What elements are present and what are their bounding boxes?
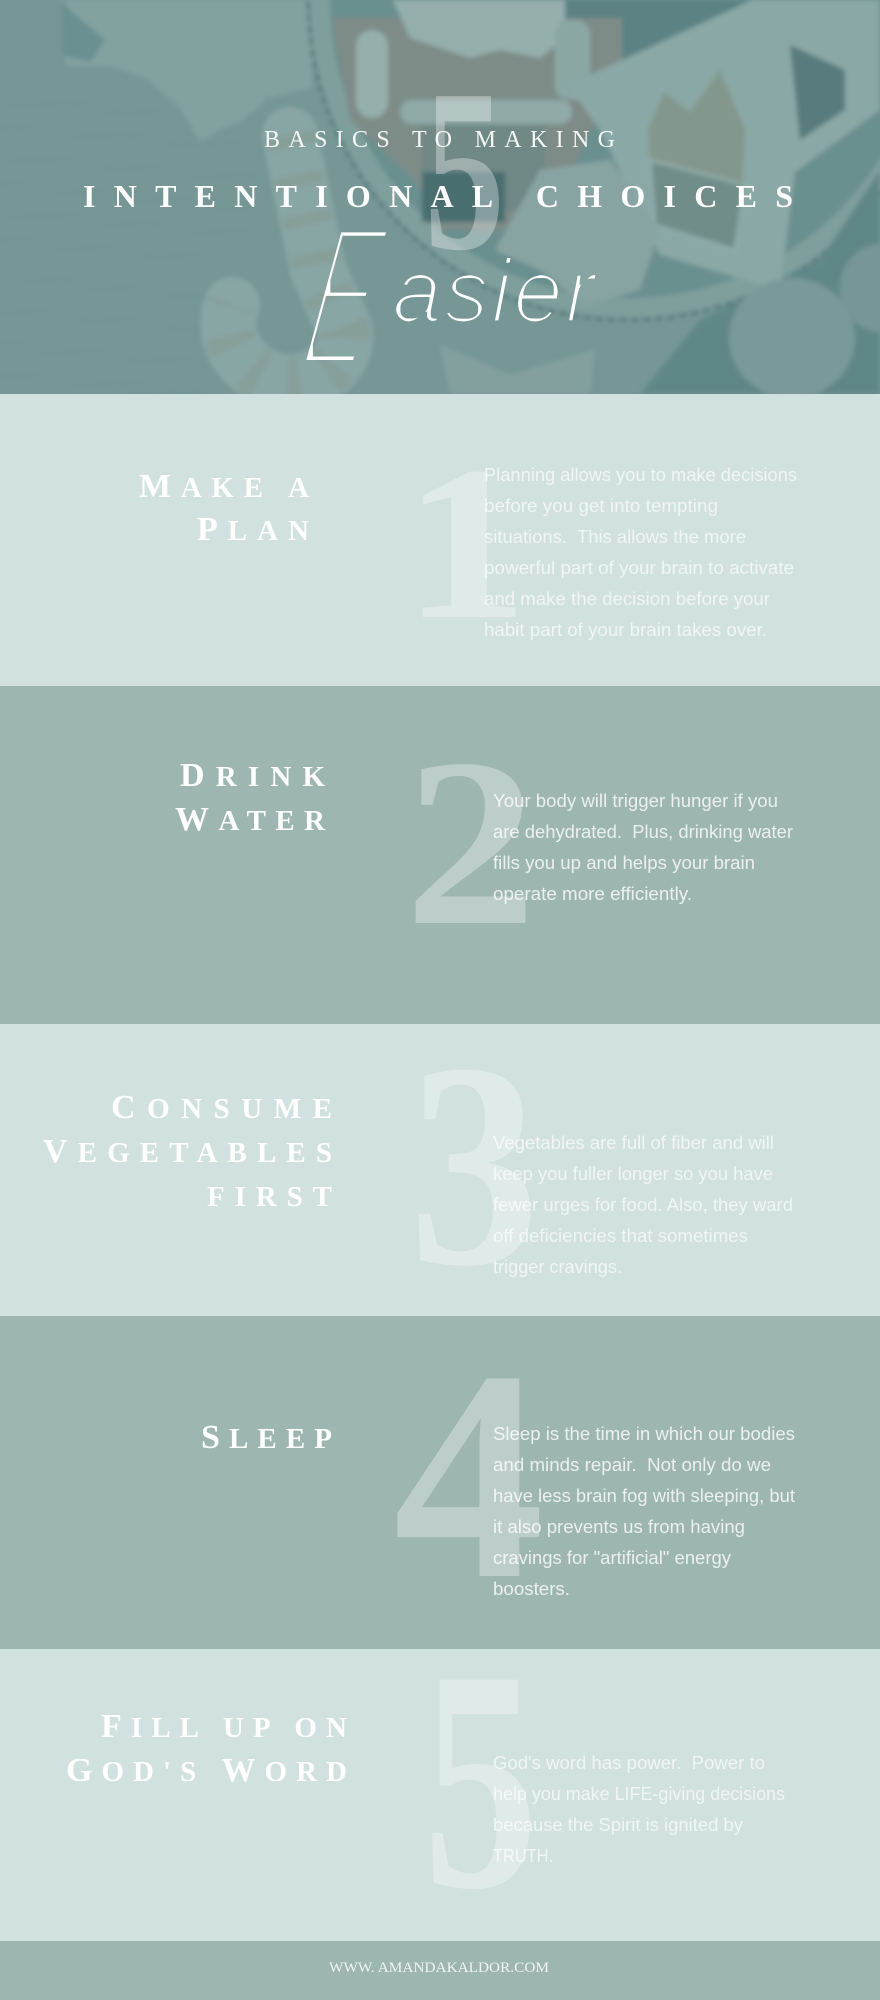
heading: make a plan: P LAN <box>197 511 309 548</box>
heading: fill up on God's word: F ILL UP ON <box>101 1708 347 1745</box>
numeral 3: 3 <box>409 1003 539 1326</box>
panel: hero header <box>0 0 880 410</box>
body text 5: TRUTH. <box>493 1846 553 1866</box>
heading: sleep: S LEEP <box>201 1419 332 1456</box>
footer band <box>0 1941 880 2000</box>
hero script word: Easier <box>290 184 598 410</box>
heading: make a plan <box>139 468 309 548</box>
body text 5: help you make LIFE-giving decisions <box>493 1784 785 1804</box>
top left cookie <box>62 0 312 142</box>
body text 2 <box>493 791 793 904</box>
candy cane <box>228 135 345 382</box>
body text 4: have less brain fog with sleeping, but <box>493 1486 795 1506</box>
body text 5 <box>493 1753 785 1866</box>
gingerbread house <box>568 0 880 290</box>
plate <box>332 0 880 296</box>
hero line: basics to making: BASICS TO MAKING <box>264 127 615 153</box>
body text 4 <box>493 1424 795 1599</box>
heading: consume vegetables first <box>43 1089 332 1213</box>
body text 2: Your body will trigger hunger if you <box>493 791 778 811</box>
body text 2: fills you up and helps your brain <box>493 853 755 873</box>
heading: consume vegetables first: C ONSUME <box>111 1089 332 1126</box>
body text 1: powerful part of your brain to activate <box>484 558 794 578</box>
body text 4: and minds repair. Not only do we <box>493 1455 771 1475</box>
body text 3: Vegetables are full of fiber and will <box>493 1133 774 1153</box>
santa cookie <box>332 18 622 230</box>
panel 1: make a plan <box>0 394 880 686</box>
hero background: cookie photo under teal tint <box>0 0 880 398</box>
body text 1: before you get into tempting <box>484 496 718 516</box>
body text 4: boosters. <box>493 1579 570 1599</box>
heading: drink water: D RINK <box>180 757 325 794</box>
body text 2: operate more efficiently. <box>493 884 692 904</box>
heading: drink water <box>175 757 326 838</box>
body text 4: it also prevents us from having <box>493 1517 745 1537</box>
numeral 4: 4 <box>393 1309 545 1642</box>
ornaments <box>729 278 855 398</box>
dark corners <box>640 170 880 394</box>
body text 5: God's word has power. Power to <box>493 1753 765 1773</box>
heading: consume vegetables first: V EGETABLES <box>43 1133 332 1170</box>
hero line: intentional choices: INTENTIONAL CHOICES <box>83 178 793 214</box>
numeral 1: 1 <box>403 422 529 665</box>
body text 2: are dehydrated. Plus, drinking water <box>493 822 793 842</box>
body text 3: keep you fuller longer so you have <box>493 1164 773 1184</box>
body text 4: Sleep is the time in which our bodies <box>493 1424 795 1444</box>
body text 1: and make the decision before your <box>484 589 770 609</box>
hero script word: Easier: E <box>290 184 399 410</box>
hero faint numeral 5: 5 <box>424 42 505 299</box>
body text 3: trigger cravings. <box>493 1257 622 1277</box>
body text 1 <box>484 465 797 640</box>
hero script word: Easier: asier <box>392 242 598 342</box>
heading: consume vegetables first: FIRST <box>207 1181 332 1213</box>
snowy cookie <box>495 160 660 305</box>
numeral 2: 2 <box>404 709 537 975</box>
numeral 5: 5 <box>423 1605 538 1955</box>
heading: fill up on God's word <box>66 1708 347 1789</box>
body text 1: habit part of your brain takes over. <box>484 620 767 640</box>
heading: fill up on God's word: G OD'S W ORD <box>66 1752 347 1789</box>
heading: make a plan: M AKE A <box>139 468 309 505</box>
body text 3 <box>493 1133 793 1277</box>
panel 5: fill up on God's word <box>0 1605 880 1955</box>
panel 2: drink water <box>0 686 880 1024</box>
body text 1: Planning allows you to make decisions <box>484 465 797 485</box>
body text 1: situations. This allows the more <box>484 527 746 547</box>
body text 3: off deficiencies that sometimes <box>493 1226 748 1246</box>
body text 5: because the Spirit is ignited by <box>493 1815 743 1835</box>
body text 4: cravings for "artificial" energy <box>493 1548 731 1568</box>
body text 3: fewer urges for food. Also, they ward <box>493 1195 793 1215</box>
heading: drink water: W ATER <box>175 801 326 838</box>
panel 3: consume vegetables first <box>0 1003 880 1326</box>
footer website: WWW. AMANDAKALDOR.COM <box>329 1960 549 1976</box>
panel 4: sleep <box>0 1309 880 1649</box>
